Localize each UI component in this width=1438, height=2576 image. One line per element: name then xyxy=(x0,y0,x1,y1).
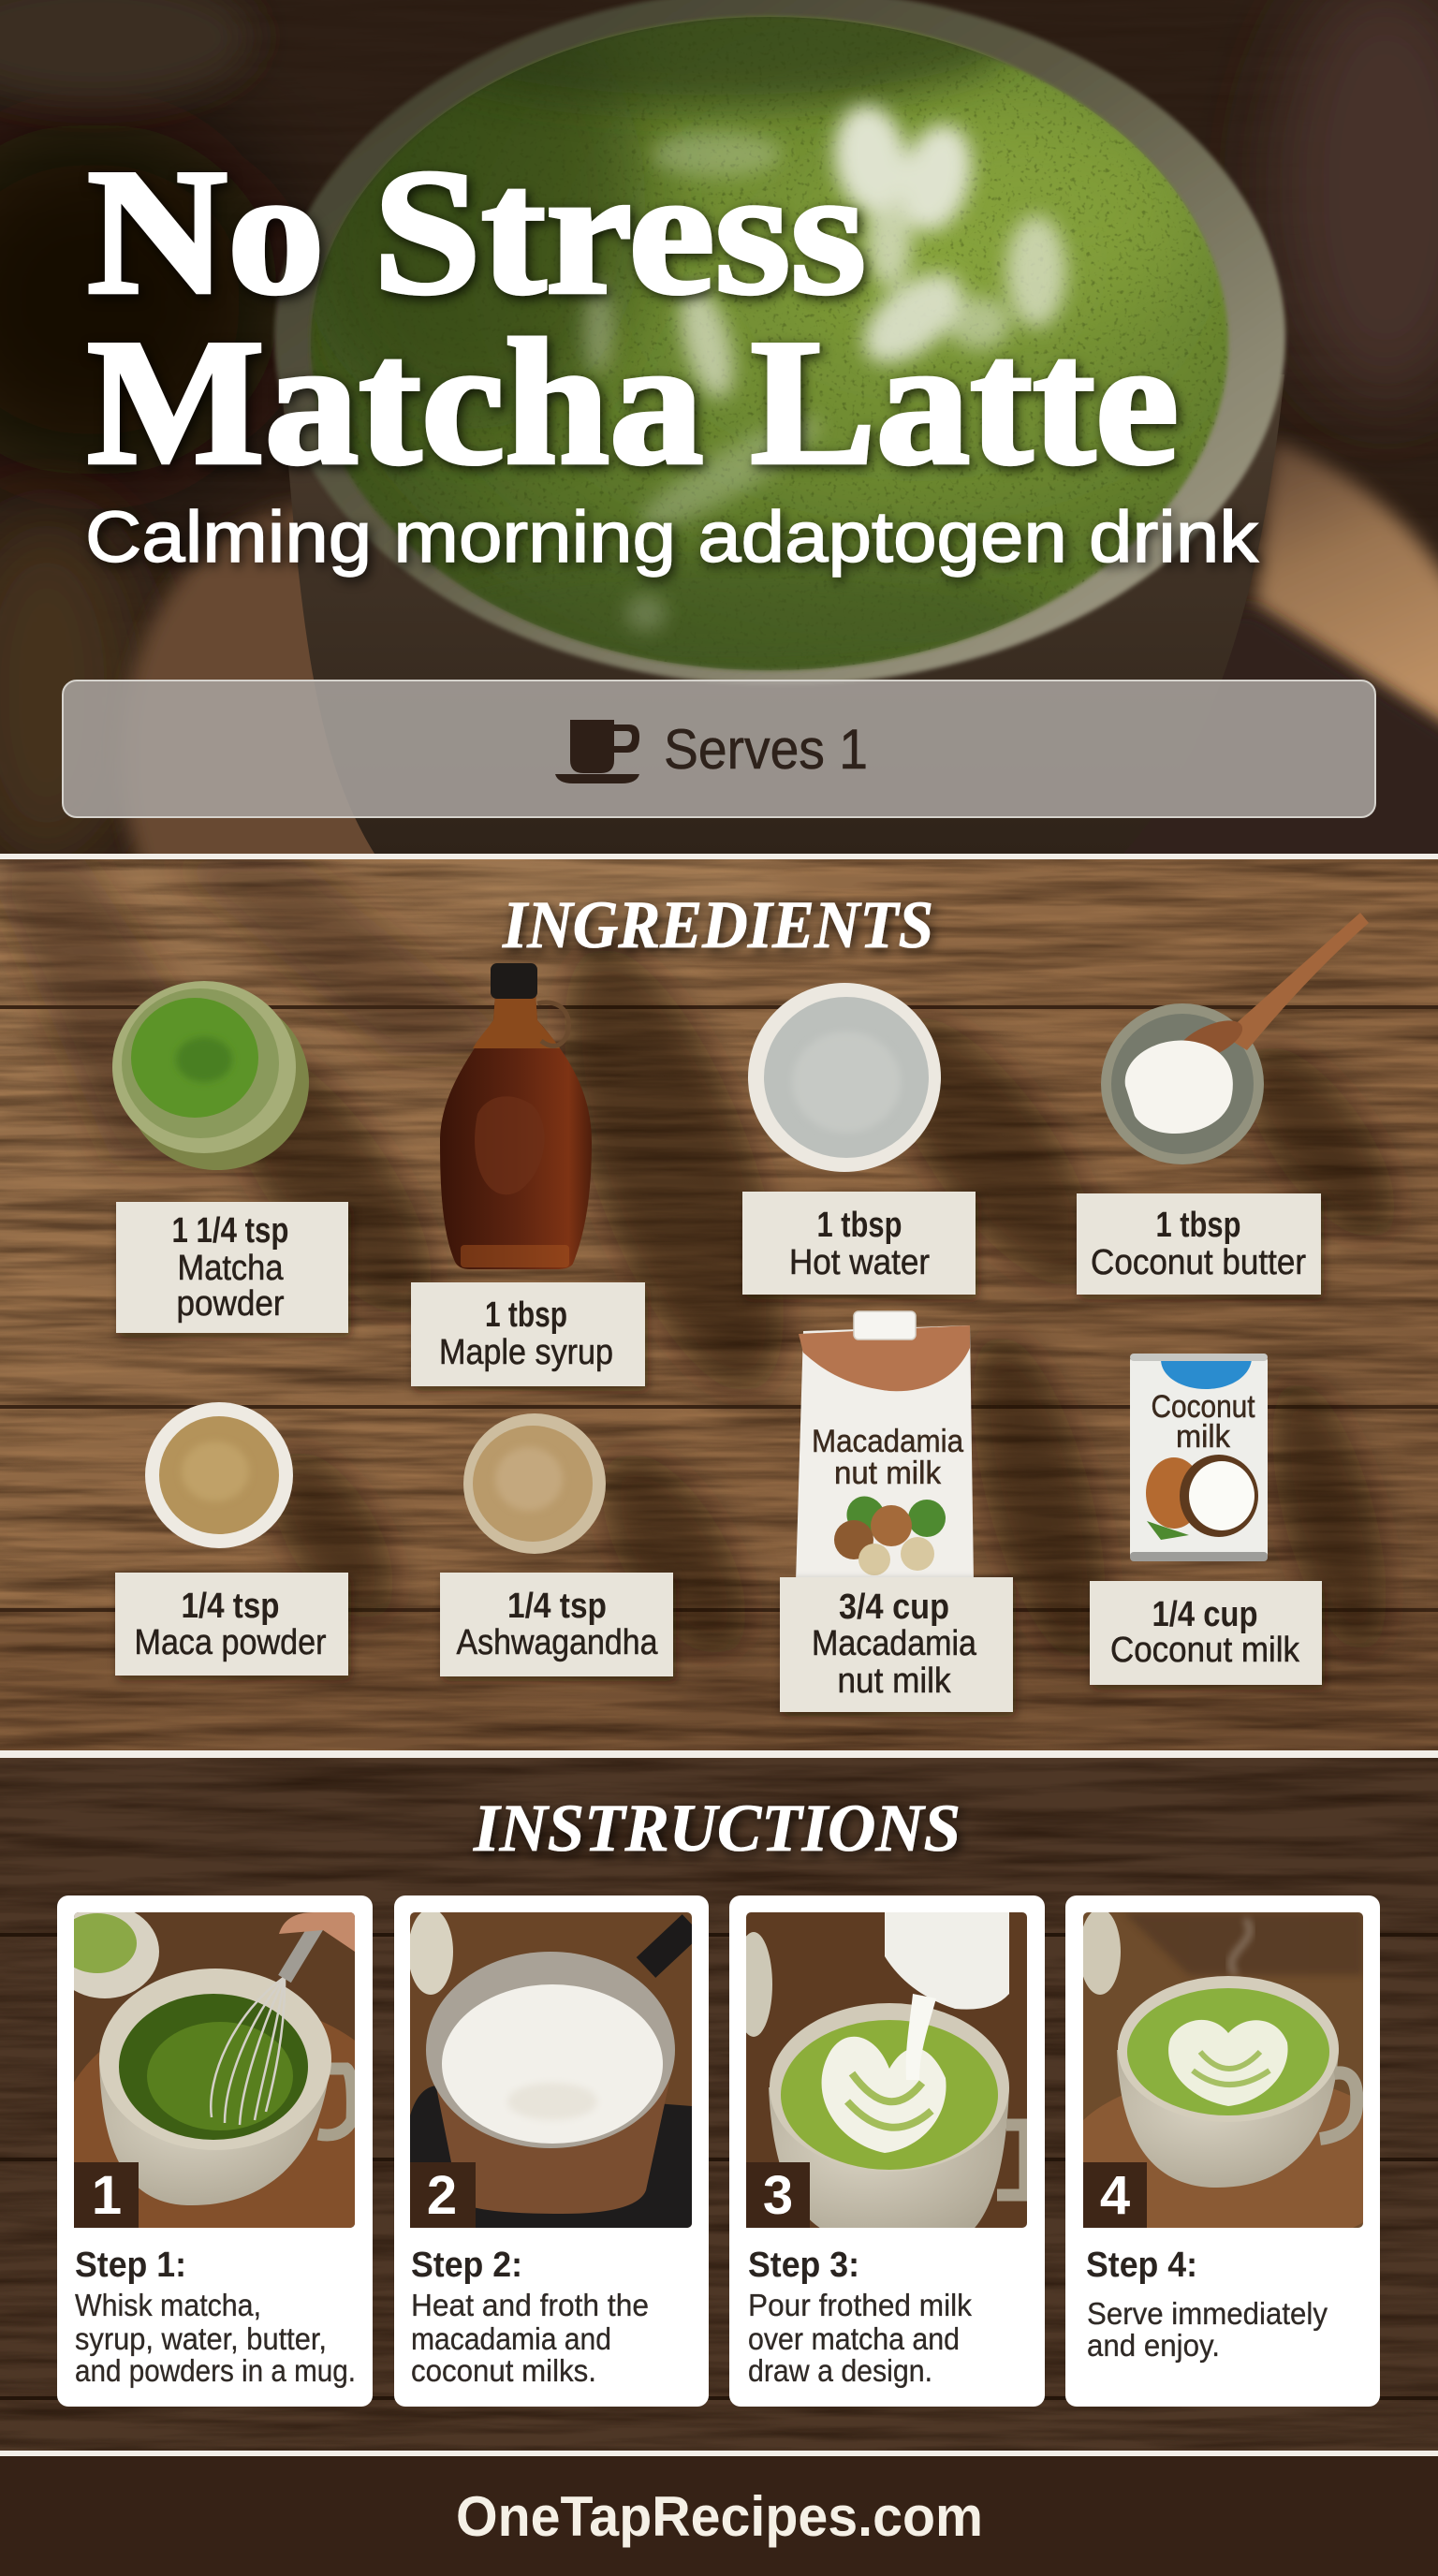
step 2 text: Heat and froth the xyxy=(411,2288,649,2322)
label: maca powder: Maca powder xyxy=(135,1623,327,1662)
icon: macadamia nut milk carton: nut milk xyxy=(834,1456,942,1491)
icon: ashwagandha jar xyxy=(463,1413,606,1554)
photo: heating milk xyxy=(408,1909,692,2228)
step 3 text: Step 3: xyxy=(748,2246,859,2285)
step 1 text: and powders in a mug. xyxy=(75,2353,356,2388)
icon: coconut milk can xyxy=(1130,1354,1268,1561)
step 4 text: Serve immediately xyxy=(1087,2296,1328,2331)
number badge 1 xyxy=(74,2162,139,2228)
photo: matcha latte cup xyxy=(274,0,1285,854)
step 4 text: Step 4: xyxy=(1086,2246,1197,2285)
label: hot water xyxy=(742,1192,976,1295)
step 2 text: coconut milks. xyxy=(411,2353,596,2388)
label: macadamia nut milk: Macadamia xyxy=(812,1624,977,1663)
icon: hot water bowl xyxy=(748,983,941,1172)
saucer right with sunlight xyxy=(1255,440,1438,739)
title xyxy=(88,168,1186,477)
icon: macadamia nut milk carton xyxy=(796,1311,974,1582)
step 3 text: Pour frothed milk xyxy=(748,2288,972,2322)
label: ashwagandha xyxy=(440,1573,673,1676)
icon: matcha jar xyxy=(112,981,309,1170)
label: maple syrup: Maple syrup xyxy=(439,1333,613,1372)
card: step 2 xyxy=(394,1895,709,2407)
icon: coffee cup xyxy=(555,720,639,783)
subtitle: Calming morning adaptogen drink xyxy=(85,497,1259,578)
panel: instructions xyxy=(0,1758,1438,2451)
label: matcha powder: 1 1/4 tsp xyxy=(172,1211,288,1251)
step 3 text: over matcha and xyxy=(748,2321,960,2356)
label: coconut milk xyxy=(1090,1581,1322,1685)
label: coconut milk: 1/4 cup xyxy=(1152,1595,1258,1634)
latte art xyxy=(584,100,1066,632)
step 1 text: syrup, water, butter, xyxy=(75,2321,327,2356)
label: maca powder xyxy=(115,1573,348,1676)
photo: whisking matcha xyxy=(51,1905,412,2284)
servings bar xyxy=(63,681,1375,817)
label: matcha powder xyxy=(116,1202,348,1333)
icon: coconut milk can: Coconut xyxy=(1152,1389,1255,1425)
number badge 1: 1 xyxy=(92,2165,122,2226)
label: maca powder: 1/4 tsp xyxy=(182,1587,279,1626)
number badge 4 xyxy=(1083,2162,1147,2228)
footer xyxy=(0,2456,1438,2576)
heading: instructions: INSTRUCTIONS xyxy=(473,1791,961,1866)
step 3 text xyxy=(748,2246,972,2388)
icon: maple syrup bottle xyxy=(440,963,592,1269)
label: ashwagandha: 1/4 tsp xyxy=(507,1587,607,1626)
photo: finished latte xyxy=(1063,1909,1409,2251)
icon: macadamia nut milk carton: Macadamia xyxy=(812,1424,963,1459)
photo: pouring milk xyxy=(735,1912,1027,2237)
label: maple syrup xyxy=(411,1282,645,1386)
label: coconut butter: 1 tbsp xyxy=(1155,1206,1241,1245)
label: macadamia nut milk: nut milk xyxy=(837,1661,951,1701)
number badge 3 xyxy=(746,2162,810,2228)
step 2 text: Step 2: xyxy=(411,2246,522,2285)
step 4 text xyxy=(1086,2246,1328,2363)
label: macadamia nut milk xyxy=(780,1577,1013,1712)
panel: ingredients xyxy=(0,859,1438,1750)
number badge 2: 2 xyxy=(427,2165,457,2226)
label: hot water: 1 tbsp xyxy=(816,1206,902,1245)
label: matcha powder: powder xyxy=(176,1284,285,1324)
label: coconut milk: Coconut milk xyxy=(1110,1631,1300,1670)
label: coconut butter xyxy=(1077,1193,1321,1295)
label: coconut butter: Coconut butter xyxy=(1091,1243,1306,1282)
label: matcha powder: Matcha xyxy=(178,1249,284,1288)
card: step 3 xyxy=(729,1895,1045,2407)
label: hot water: Hot water xyxy=(789,1243,930,1282)
label: ashwagandha: Ashwagandha xyxy=(457,1623,658,1662)
step 1 text: Step 1: xyxy=(75,2246,186,2285)
footer website text: OneTapRecipes.com xyxy=(456,2485,983,2548)
saucer left xyxy=(118,499,374,854)
servings text: Serves 1 xyxy=(664,718,868,781)
title: No Stress xyxy=(87,132,866,331)
icon: coconut butter bowl with spoon xyxy=(1101,913,1369,1164)
label: macadamia nut milk: 3/4 cup xyxy=(839,1588,949,1627)
card: step 4 xyxy=(1063,1895,1409,2407)
step 4 text: and enjoy. xyxy=(1087,2328,1220,2363)
card: step 1 xyxy=(51,1895,412,2407)
panel: hero xyxy=(0,0,1438,854)
icon: coconut milk can: milk xyxy=(1176,1419,1231,1455)
step 1 text: Whisk matcha, xyxy=(75,2288,261,2322)
step 1 text xyxy=(75,2246,356,2388)
icon: maca bowl xyxy=(145,1402,293,1548)
title: Matcha Latte xyxy=(87,302,1179,502)
heading: ingredients: INGREDIENTS xyxy=(502,887,933,962)
step 3 text: draw a design. xyxy=(748,2353,932,2388)
step 2 text xyxy=(411,2246,649,2388)
step 2 text: macadamia and xyxy=(411,2321,611,2356)
number badge 4: 4 xyxy=(1100,2165,1130,2226)
number badge 3: 3 xyxy=(763,2165,793,2226)
label: maple syrup: 1 tbsp xyxy=(485,1295,567,1335)
number badge 2 xyxy=(410,2162,476,2228)
